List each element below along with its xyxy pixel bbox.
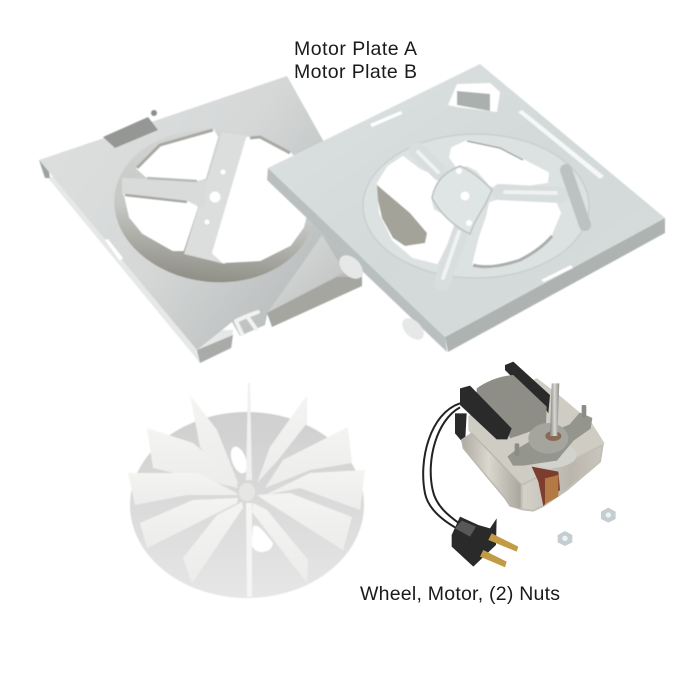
label: motor plates: Motor Plate A (294, 38, 417, 60)
window slot (103, 117, 158, 148)
label: motor plates: Motor Plate B (294, 61, 417, 83)
bent tabs (236, 312, 258, 334)
power cord (423, 403, 460, 528)
plate A seen through opening (377, 185, 427, 246)
wheel openings (228, 444, 250, 476)
hex nuts (601, 508, 616, 523)
label: motor plates (294, 38, 417, 83)
embossed arms (417, 150, 560, 283)
label: wheel, motor, nuts: Wheel, Motor, (2) Nuts (360, 583, 560, 605)
plate feet (335, 251, 367, 283)
motor plate A (39, 76, 362, 363)
bracket (527, 442, 577, 468)
copper winding (532, 467, 560, 506)
fan wheel (128, 383, 365, 598)
motor plate B (267, 64, 665, 352)
plug (452, 517, 497, 567)
slots (370, 111, 402, 127)
motor (423, 362, 616, 567)
